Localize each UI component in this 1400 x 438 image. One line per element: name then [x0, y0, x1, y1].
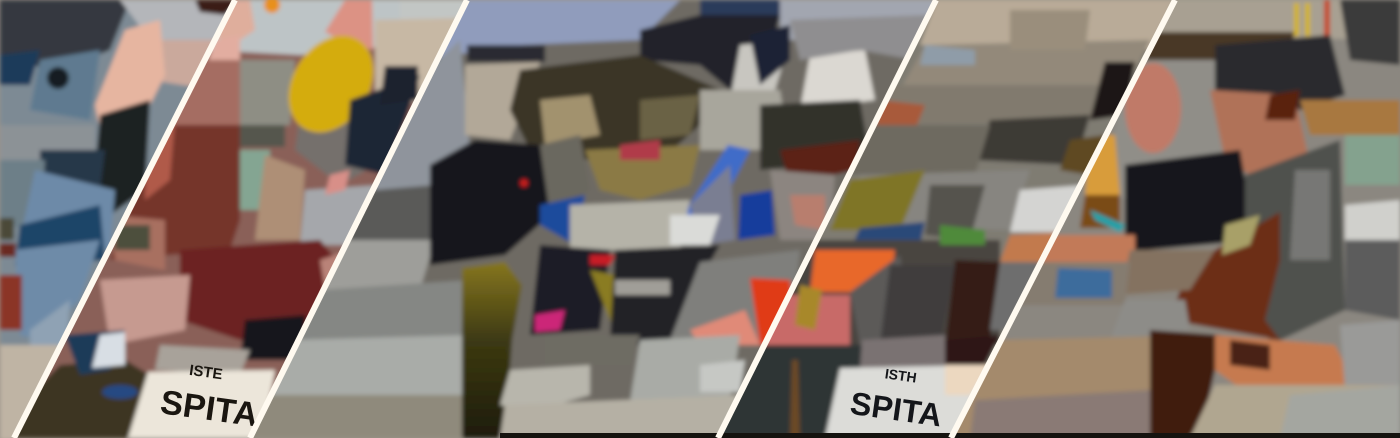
- label on crate, right: ISTH: [884, 365, 918, 386]
- panel: strip one, person in jeans: [0, 0, 240, 438]
- label on crate, left: ISTE: [188, 362, 224, 383]
- label on crate, left: [160, 364, 254, 426]
- label on crate, right: SPITA: [848, 385, 944, 433]
- panel: strip four, sepia street view and crate: [724, 0, 1172, 433]
- panel: strip two, pink tinted stall with yellow hat: [0, 0, 470, 438]
- panel: strip three, volunteers and crates: [240, 0, 940, 438]
- dark ground: [724, 342, 864, 433]
- label on crate, right: [850, 368, 940, 426]
- bottom edge strip: [500, 433, 1400, 438]
- panel: strip five, volunteers at table: [940, 0, 1400, 438]
- olive trousers: [462, 262, 522, 438]
- label on crate, left: SPITA: [158, 383, 260, 435]
- icon: yellow hard hat: [286, 34, 376, 136]
